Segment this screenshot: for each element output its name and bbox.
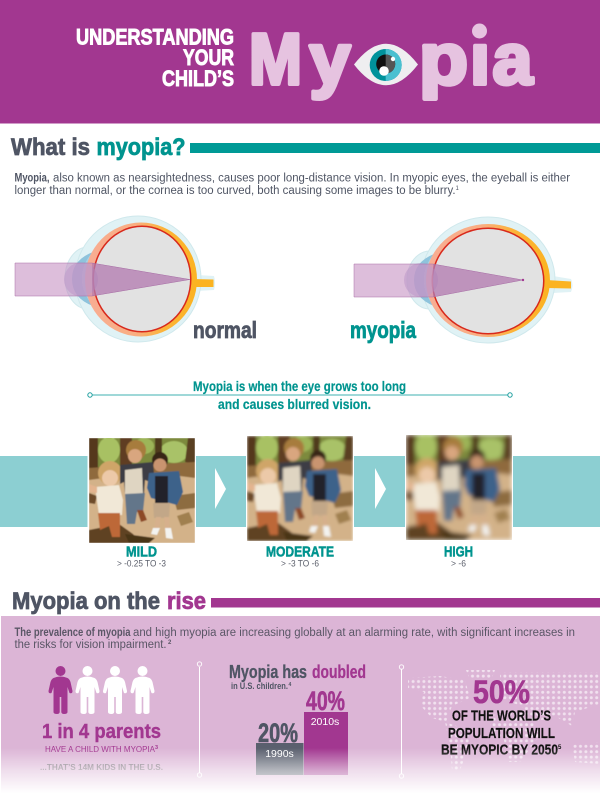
intro paragraph: longer than normal, or the cornea is too curved, both causing some images to be blurry. bbox=[14, 185, 456, 197]
divider right bbox=[399, 665, 404, 778]
light beam bbox=[15, 262, 190, 296]
title word Myopia bbox=[249, 20, 533, 100]
stat: 50 percent of world: BE MYOPIC BY 2050 bbox=[441, 742, 558, 758]
header banner bbox=[0, 0, 600, 124]
header intro text: YOUR bbox=[183, 45, 234, 70]
divider left bbox=[197, 662, 202, 777]
bottom fade overlay bbox=[0, 748, 600, 793]
label: high: HIGH bbox=[444, 544, 473, 560]
label: moderate bbox=[266, 544, 334, 570]
stat: 1 in 4 parents: ...THAT’S 14M KIDS IN THE U.S. bbox=[40, 763, 163, 772]
callout: myopia definition bbox=[88, 379, 512, 412]
intro paragraph: also known as nearsightedness, causes poor long-distance vision. In myopic eyes, the eyeball is either bbox=[53, 172, 570, 184]
title word Myopia: ı bbox=[470, 20, 490, 100]
label: myopia: myopia bbox=[350, 317, 417, 343]
intro paragraph: 1 bbox=[456, 186, 460, 192]
stat: 1 in 4 parents: 1 in 4 parents bbox=[42, 720, 161, 743]
stat: myopia has doubled heading: 4 bbox=[288, 682, 292, 688]
bar chart: doubled prevalence: 40% bbox=[306, 686, 345, 716]
arrow: moderate to high bbox=[375, 468, 386, 509]
arrow: mild to moderate bbox=[215, 468, 226, 509]
stat: myopia has doubled heading bbox=[229, 662, 366, 691]
bar chart: doubled prevalence: 20% bbox=[258, 718, 298, 748]
diagram: normal eye bbox=[15, 216, 215, 342]
stat: myopia has doubled heading: in U.S. children. bbox=[231, 681, 288, 691]
heading: Myopia on the rise bbox=[12, 588, 600, 615]
stat: 1 in 4 parents bbox=[40, 720, 163, 772]
stat: 50 percent of world: POPULATION WILL bbox=[448, 725, 555, 742]
icon: parents row bbox=[48, 666, 154, 714]
title word Myopia: p bbox=[419, 20, 468, 100]
heading: What is myopia?: What is bbox=[11, 134, 90, 161]
heading: What is myopia?: myopia? bbox=[96, 134, 186, 161]
panel intro text bbox=[14, 627, 575, 651]
bar chart: doubled prevalence: 1990s bbox=[265, 748, 294, 760]
title word Myopia: y bbox=[310, 20, 350, 100]
label: moderate: > -3 TO -6 bbox=[281, 558, 319, 570]
header intro text: UNDERSTANDING bbox=[76, 24, 234, 50]
stat: myopia has doubled heading: Myopia has bbox=[229, 662, 307, 682]
label: mild: MILD bbox=[126, 544, 157, 560]
header intro text bbox=[76, 24, 234, 91]
intro paragraph bbox=[14, 172, 570, 197]
panel intro text: 2 bbox=[168, 640, 172, 646]
title word Myopia: a bbox=[492, 20, 533, 100]
bar chart: doubled prevalence: 2010s bbox=[311, 716, 339, 728]
stat: 50 percent of world: 5 bbox=[558, 745, 562, 751]
photo: moderate blur bbox=[247, 435, 353, 541]
stat: 50 percent of world: OF THE WORLD’S bbox=[452, 708, 551, 724]
panel intro text: The prevalence of myopia bbox=[14, 627, 131, 639]
panel intro text: and high myopia are increasing globally at an alarming rate, with significant increases in bbox=[133, 627, 575, 639]
icon: eye in title bbox=[354, 44, 418, 85]
label: high: > -6 bbox=[451, 558, 466, 570]
bar chart: doubled prevalence bbox=[256, 686, 348, 775]
heading: Myopia on the rise: Myopia on the bbox=[12, 588, 160, 615]
light beam bbox=[354, 263, 524, 297]
heading: Myopia on the rise: rise bbox=[167, 588, 206, 615]
title word Myopia: M bbox=[249, 20, 302, 100]
label: moderate: MODERATE bbox=[266, 544, 334, 560]
photo: high blur bbox=[406, 434, 512, 540]
label: high bbox=[444, 544, 473, 570]
heading: What is myopia? bbox=[11, 134, 600, 161]
label: normal: normal bbox=[193, 317, 257, 343]
stat: 1 in 4 parents: 3 bbox=[155, 745, 158, 751]
stat: 50 percent of world: 50% bbox=[473, 674, 530, 710]
label: mild: > -0.25 TO -3 bbox=[117, 558, 166, 570]
severity band bbox=[0, 456, 600, 527]
photo: mild blur bbox=[89, 437, 195, 543]
callout: myopia definition: and causes blurred vision. bbox=[218, 397, 371, 412]
panel: myopia on the rise bbox=[1, 616, 600, 806]
stat: 1 in 4 parents: HAVE A CHILD WITH MYOPIA bbox=[45, 745, 156, 754]
panel intro text: the risks for vision impairment. bbox=[14, 639, 166, 651]
stat: myopia has doubled heading: doubled bbox=[312, 662, 366, 682]
intro paragraph: Myopia, bbox=[14, 172, 50, 184]
map: world dots bbox=[408, 670, 600, 770]
diagram: myopic eye bbox=[354, 217, 572, 343]
stat: 50 percent of world bbox=[441, 674, 562, 758]
header intro text: CHILD’S bbox=[162, 66, 234, 91]
callout: myopia definition: Myopia is when the eye grows too long bbox=[193, 379, 406, 394]
label: mild bbox=[117, 544, 166, 570]
